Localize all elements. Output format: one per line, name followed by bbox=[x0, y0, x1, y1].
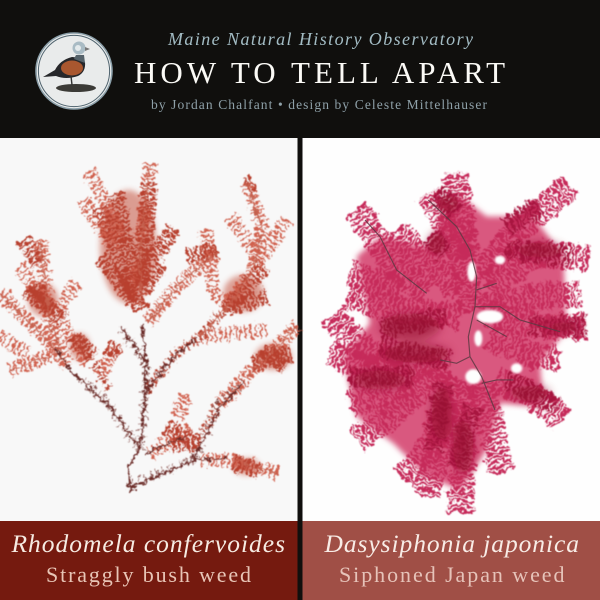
panel: left photo background bbox=[0, 138, 298, 521]
header band bbox=[0, 0, 600, 137]
logo: harlequin duck badge bbox=[36, 33, 112, 109]
scientific name, right: Dasysiphonia japonica bbox=[324, 529, 579, 558]
organisation name: Maine Natural History Observatory bbox=[167, 29, 473, 49]
common name, right: Siphoned Japan weed bbox=[339, 562, 564, 587]
byline: by Jordan Chalfant • design by Celeste Mittelhauser bbox=[151, 97, 487, 112]
title: HOW TO TELL APART bbox=[134, 55, 505, 90]
seaweed: Rhodomela confervoides bbox=[0, 163, 297, 492]
panel: right photo background bbox=[302, 138, 600, 521]
seaweed: Dasysiphonia japonica bbox=[330, 173, 590, 513]
panel: right name plate bbox=[302, 521, 600, 600]
panel: left name plate bbox=[0, 521, 298, 600]
common name, left: Straggly bush weed bbox=[46, 562, 251, 587]
scientific name, left: Rhodomela confervoides bbox=[10, 529, 285, 558]
